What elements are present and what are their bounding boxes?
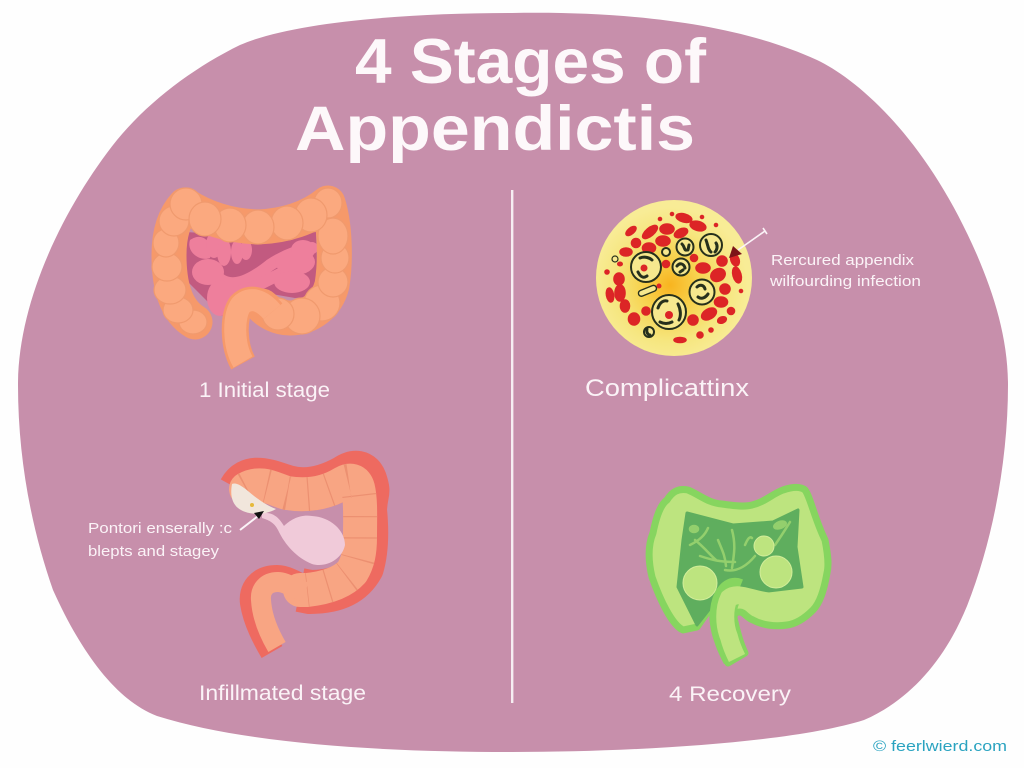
label: initial stage: 1 Initial stage [199,379,330,402]
inflamed patch [231,483,276,514]
central divider [511,190,513,703]
panel: stage 3 complication [585,200,921,402]
colon silhouette [649,487,828,663]
leaves [690,520,790,570]
tail [235,300,272,363]
title [295,27,707,164]
callout text: wilfourding infection [769,273,921,290]
yellow disc [596,200,752,356]
tail inner [725,595,775,658]
title: Appendictis [295,94,695,164]
cells [631,234,722,337]
small intestine [186,232,318,316]
label: complication: Complicattinx [585,375,749,402]
arrow [729,228,767,258]
colon base [169,203,334,322]
tail rim [723,591,738,658]
icon: inflamed intestine [231,473,367,652]
interior [678,510,802,625]
swollen appendix [262,513,345,565]
icon: infection cross-section [596,200,752,356]
callout text [769,252,921,290]
label: recovery: 4 Recovery [669,683,792,706]
callout text: Rercured appendix [771,252,915,269]
callout text [88,520,233,560]
panel: stage 1 initial [152,188,349,402]
panel: stage 4 recovery [649,487,828,706]
arrow [240,511,264,530]
callout text: blepts and stagey [88,543,220,560]
callout text: Pontori enserally :c [88,520,233,537]
marker [612,256,623,266]
needle body [638,284,662,297]
icon: healthy intestine [152,188,349,363]
panel: stage 2 inflamed [88,473,367,705]
title: 4 Stages of [355,27,707,97]
red blobs [605,212,743,342]
icon: recovering intestine [649,487,828,663]
cell nuclei [638,240,717,335]
inflamed colon [240,473,367,652]
footer website credit: © feerlwierd.com [873,738,1007,755]
label: inflamed stage: Infillmated stage [199,682,366,705]
colon segments [152,188,349,334]
bubbles [683,536,792,600]
